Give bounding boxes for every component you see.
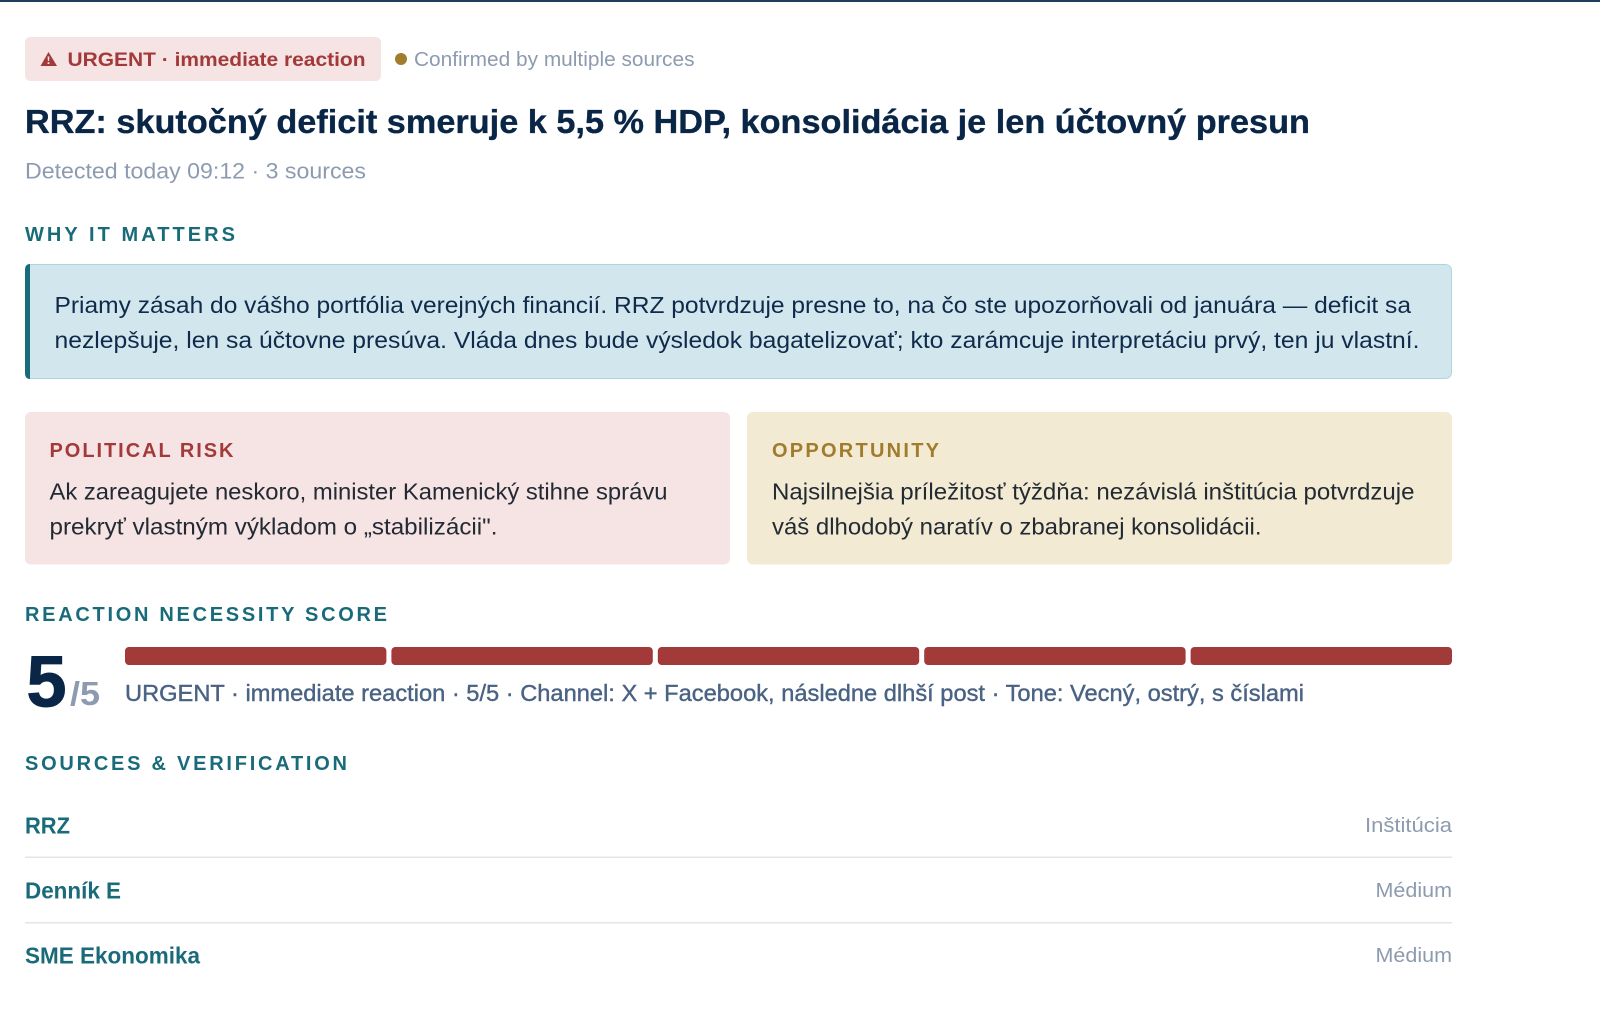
heading: sources and verification: SOURCES & VERIFICATION bbox=[25, 753, 347, 775]
score number: 5 bbox=[26, 642, 67, 722]
opportunity text bbox=[772, 478, 1414, 540]
political risk text bbox=[50, 478, 668, 540]
opportunity text: Najsilnejšia príležitosť týždňa: nezávislá inštitúcia potvrdzuje bbox=[772, 478, 1414, 504]
source row: SME Ekonomika: SME Ekonomika bbox=[25, 942, 200, 968]
title: RRZ: skutočný deficit smeruje k 5,5 % HDP, konsolidácia je len účtovný presun bbox=[25, 104, 1310, 141]
why it matters text: nezlepšuje, len sa účtovne presúva. Vláda dnes bude výsledok bagatelizovať; kto zarámcuje interpretáciu prvý, ten ju vlastní. bbox=[54, 327, 1420, 353]
score number bbox=[26, 642, 100, 722]
urgency badge bbox=[25, 37, 381, 81]
panel: opportunity bbox=[747, 412, 1452, 564]
source row: RRZ: Inštitúcia bbox=[1365, 815, 1453, 837]
source row: RRZ bbox=[25, 812, 1453, 838]
panel: why it matters bbox=[25, 264, 1452, 379]
source row: Denník E: Denník E bbox=[25, 878, 121, 904]
score description: URGENT · immediate reaction · 5/5 · Channel: X + Facebook, následne dlhší post · Tone: Vecný, ostrý, s číslami bbox=[125, 680, 1304, 706]
opportunity label: OPPORTUNITY bbox=[772, 440, 940, 462]
source row: SME Ekonomika bbox=[25, 942, 1452, 968]
badge label: URGENT · immediate reaction bbox=[68, 49, 366, 71]
political risk text: Ak zareagujete neskoro, minister Kamenický stihne správu bbox=[50, 478, 668, 504]
panel: political risk bbox=[25, 412, 730, 564]
why it matters text: Priamy zásah do vášho portfólia verejných financií. RRZ potvrdzuje presne to, na čo ste upozorňovali od januára — deficit sa bbox=[54, 292, 1411, 318]
source row: SME Ekonomika: Médium bbox=[1376, 945, 1452, 967]
detection meta: Detected today 09:12 · 3 sources bbox=[25, 158, 366, 184]
confirmation status: Confirmed by multiple sources bbox=[414, 49, 694, 71]
heading: reaction necessity score: REACTION NECESSITY SCORE bbox=[25, 604, 387, 626]
score bar: five segments bbox=[125, 647, 1452, 665]
icon: warning triangle bbox=[40, 52, 57, 66]
why it matters text bbox=[54, 292, 1420, 353]
political risk text: prekryť vlastným výkladom o „stabilizácii". bbox=[50, 514, 498, 540]
source row: RRZ: RRZ bbox=[25, 812, 70, 838]
heading: why it matters: WHY IT MATTERS bbox=[25, 224, 235, 246]
political risk label: POLITICAL RISK bbox=[50, 440, 234, 462]
source row: Denník E: Médium bbox=[1376, 880, 1452, 902]
score number: /5 bbox=[70, 675, 100, 712]
opportunity text: váš dlhodobý naratív o zbabranej konsolidácii. bbox=[772, 514, 1262, 540]
source row: Denník E bbox=[25, 878, 1452, 904]
